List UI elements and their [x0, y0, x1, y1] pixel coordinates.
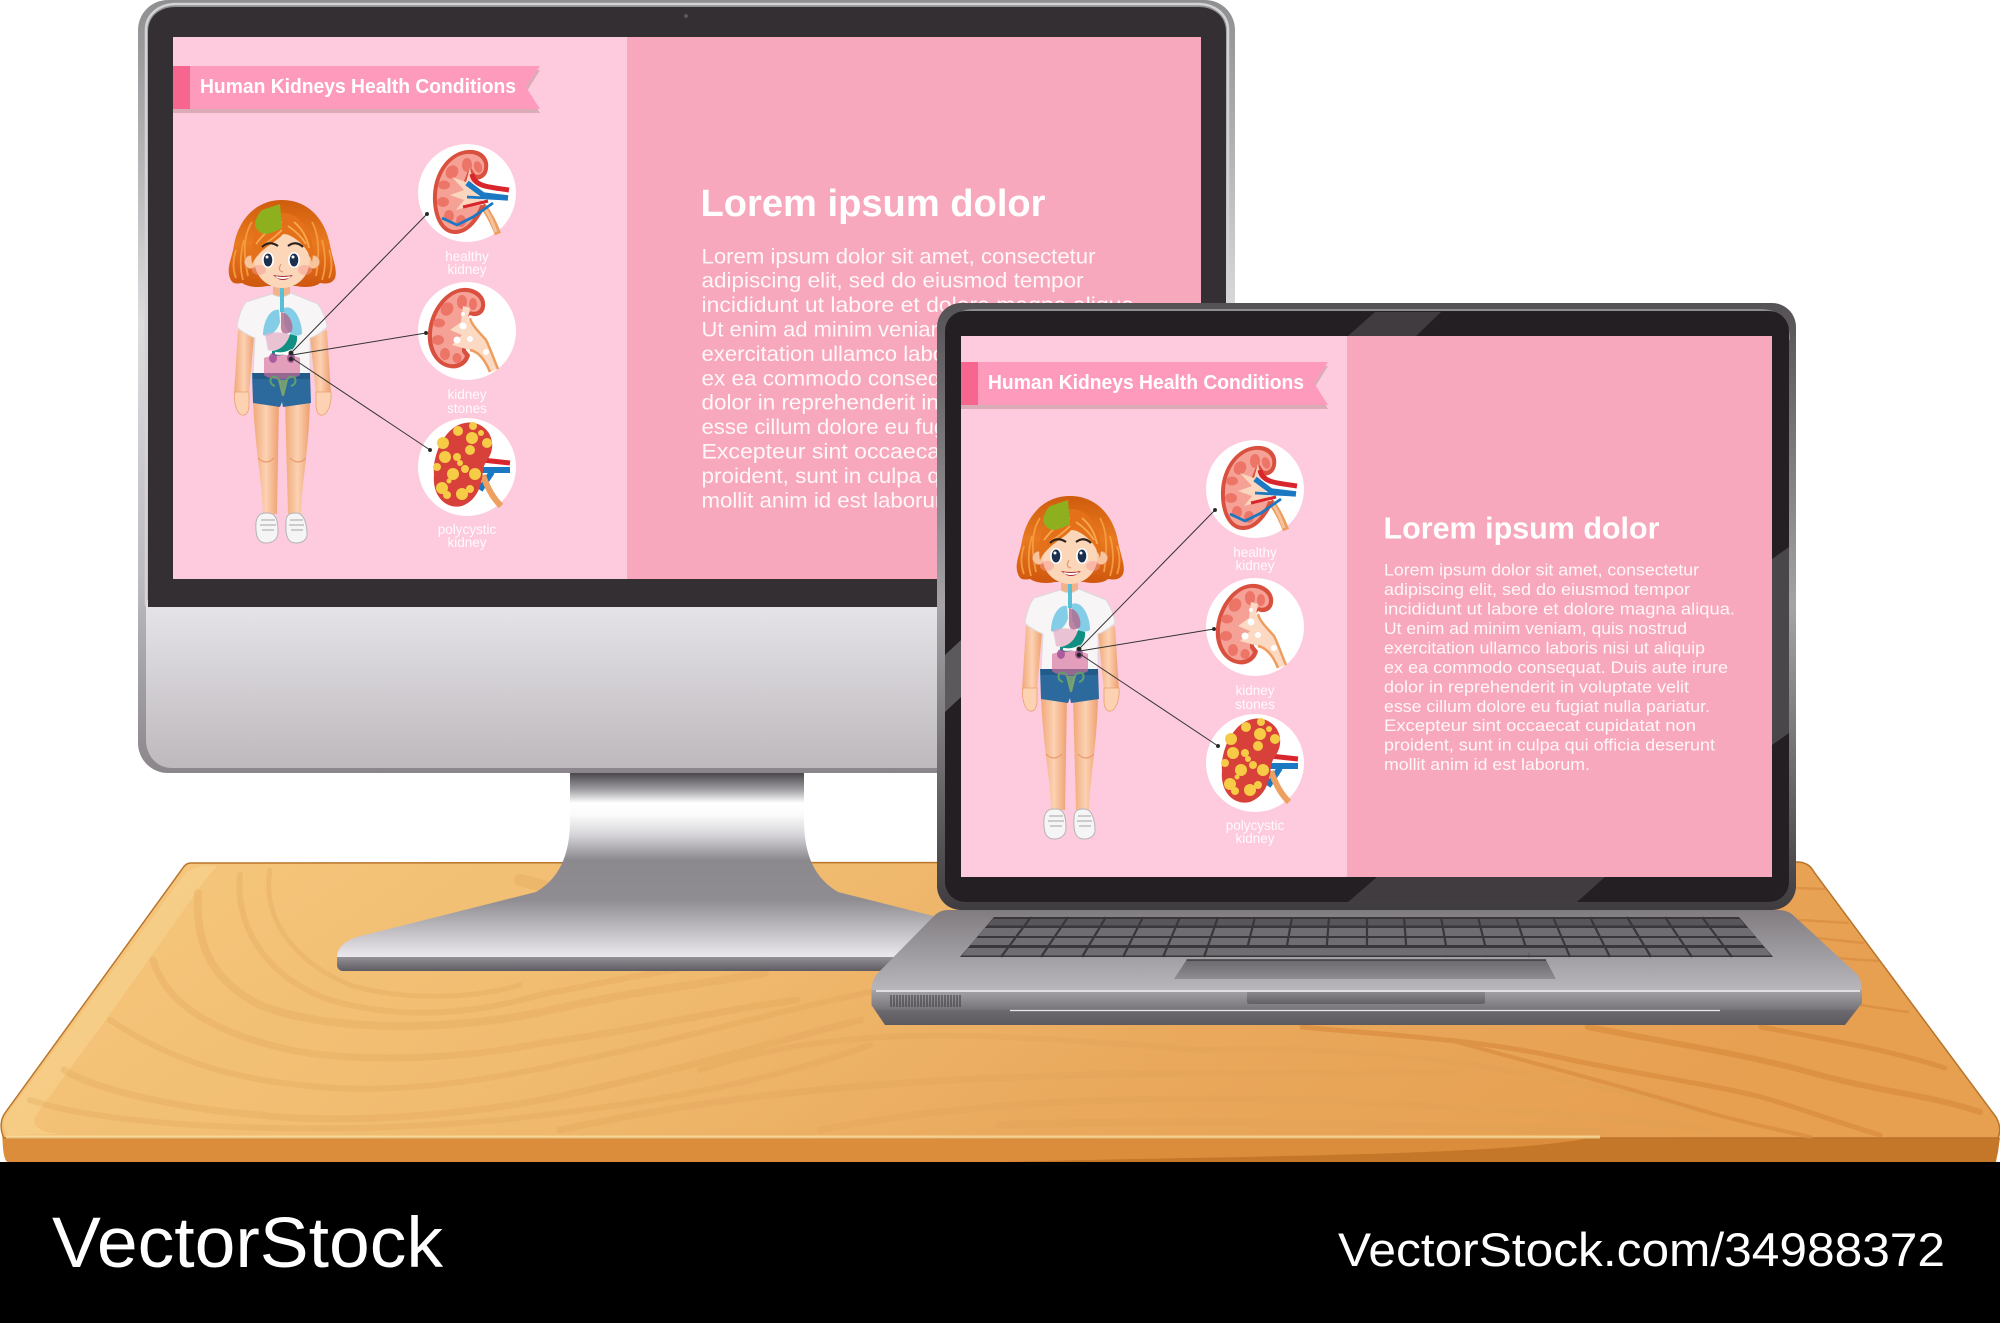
laptop base [872, 910, 1862, 1025]
monitor top highlight [146, 4, 1228, 606]
laptop body text: Excepteur sint occaecat cupidatat non [1384, 716, 1696, 735]
monitor heading: Lorem ipsum dolor [700, 183, 1046, 225]
space bar [1207, 948, 1529, 956]
monitor healthy kidney icon [418, 144, 516, 242]
stand base lip [337, 950, 1037, 971]
monitor kidney labels [438, 249, 497, 550]
laptop lid [937, 303, 1796, 910]
laptop body text: proident, sunt in culpa qui officia deserunt [1384, 736, 1715, 755]
laptop kidney labels: kidney [1235, 558, 1275, 573]
laptop body text: mollit anim id est laborum. [1384, 755, 1590, 774]
laptop body text: incididunt ut labore et dolore magna aliqua. [1384, 600, 1735, 618]
base front lip [872, 990, 1862, 1025]
stand neck and foot [337, 773, 1037, 957]
monitor screen right panel [627, 37, 1201, 579]
laptop kidney labels: polycystic [1226, 818, 1285, 833]
laptop kidney labels: kidney [1235, 831, 1275, 846]
monitor polycystic kidney icon [418, 418, 516, 516]
front notch [1247, 992, 1485, 1004]
monitor body text: proident, sunt in culpa qui officia deserunt [702, 465, 1116, 488]
desk top surface [1, 862, 2000, 1138]
monitor heading band [173, 66, 540, 113]
monitor black bezel [148, 7, 1226, 607]
laptop body text [1384, 561, 1735, 774]
monitor kidney labels: kidney [447, 262, 487, 277]
wooden desk [1, 862, 2000, 1163]
laptop body text: dolor in reprehenderit in voluptate velit [1384, 677, 1689, 696]
monitor kidney labels: kidney [447, 535, 487, 550]
monitor body text: mollit anim id est laborum. [702, 489, 960, 512]
monitor screen left panel [173, 37, 628, 579]
laptop heading: Lorem ipsum dolor [1384, 512, 1660, 546]
laptop body text: exercitation ullamco laboris nisi ut aliquip [1384, 638, 1705, 657]
monitor bottom chin [146, 600, 1226, 768]
laptop kidney labels: healthy [1233, 545, 1277, 560]
laptop girl illustration [1017, 496, 1124, 839]
monitor stand [337, 773, 1037, 971]
monitor kidney labels: polycystic [438, 522, 497, 537]
monitor pointer lines [289, 212, 432, 452]
monitor heading band: Human Kidneys Health Conditions [200, 76, 516, 98]
laptop body text: Lorem ipsum dolor sit amet, consectetur [1384, 561, 1699, 580]
laptop heading band [961, 362, 1328, 409]
monitor body text: Excepteur sint occaecat cupidatat non [702, 440, 1092, 464]
base top deck [872, 910, 1862, 992]
monitor body text: adipiscing elit, sed do eiusmod tempor [702, 270, 1084, 293]
monitor body text [702, 245, 1140, 512]
desk front edge dark grain [1000, 1138, 2000, 1162]
laptop computer [872, 303, 1862, 1025]
lid top highlight [946, 310, 1789, 340]
side vent [891, 995, 960, 1007]
monitor kidney labels: kidney [447, 387, 487, 402]
monitor kidney labels: stones [447, 401, 487, 416]
monitor body text: exercitation ullamco laboris nisi ut aliquip [702, 343, 1102, 366]
footer url: VectorStock.com/34988372 [1338, 1223, 1945, 1276]
monitor outer frame [138, 0, 1235, 773]
laptop healthy kidney icon [1206, 440, 1304, 538]
keyboard [960, 917, 1773, 957]
laptop body text: esse cillum dolore eu fugiat nulla pariatur. [1384, 697, 1710, 716]
desk left highlight [4, 866, 218, 1135]
laptop kidney labels: kidney [1235, 683, 1275, 698]
laptop kidney stones icon [1206, 578, 1304, 676]
base highlight lines [876, 990, 1860, 992]
footer black background [0, 1162, 2000, 1323]
laptop heading band: Human Kidneys Health Conditions [988, 372, 1304, 394]
monitor kidney labels: healthy [445, 249, 489, 264]
monitor camera [684, 14, 688, 18]
laptop body text: ex ea commodo consequat. Duis aute irure [1384, 658, 1728, 677]
monitor kidney stones icon [418, 282, 516, 380]
desk front highlight line [6, 1136, 1600, 1138]
base lower highlight [1010, 1010, 1720, 1012]
monitor body text: ex ea commodo consequat. Duis aute irure [702, 367, 1130, 390]
laptop screen left panel [961, 336, 1347, 877]
trackpad [1174, 960, 1556, 979]
desk wood grain [30, 870, 1980, 1137]
monitor girl illustration [229, 200, 336, 543]
footer brand: VectorStock [52, 1204, 444, 1283]
laptop body text: Ut enim ad minim veniam, quis nostrud [1384, 619, 1687, 638]
laptop kidney labels: stones [1235, 697, 1275, 712]
laptop pointer lines [1077, 508, 1220, 748]
monitor body text: incididunt ut labore et dolore magna aliqua. [702, 294, 1140, 317]
laptop black bezel [945, 311, 1789, 902]
laptop screen right panel [1347, 336, 1772, 877]
laptop kidney labels [1226, 545, 1285, 846]
monitor body text: Lorem ipsum dolor sit amet, consectetur [702, 245, 1096, 268]
laptop body text: adipiscing elit, sed do eiusmod tempor [1384, 580, 1690, 599]
desk front edge [2, 1130, 2000, 1163]
monitor body text: dolor in reprehenderit in voluptate velit [702, 392, 1083, 415]
bezel reflection stripes [945, 312, 1789, 902]
footer bar [0, 1162, 2000, 1323]
monitor body text: Ut enim ad minim veniam, quis nostrud [702, 318, 1080, 342]
laptop polycystic kidney icon [1206, 714, 1304, 812]
desktop monitor [138, 0, 1235, 773]
monitor body text: esse cillum dolore eu fugiat nulla pariatur. [702, 416, 1108, 439]
